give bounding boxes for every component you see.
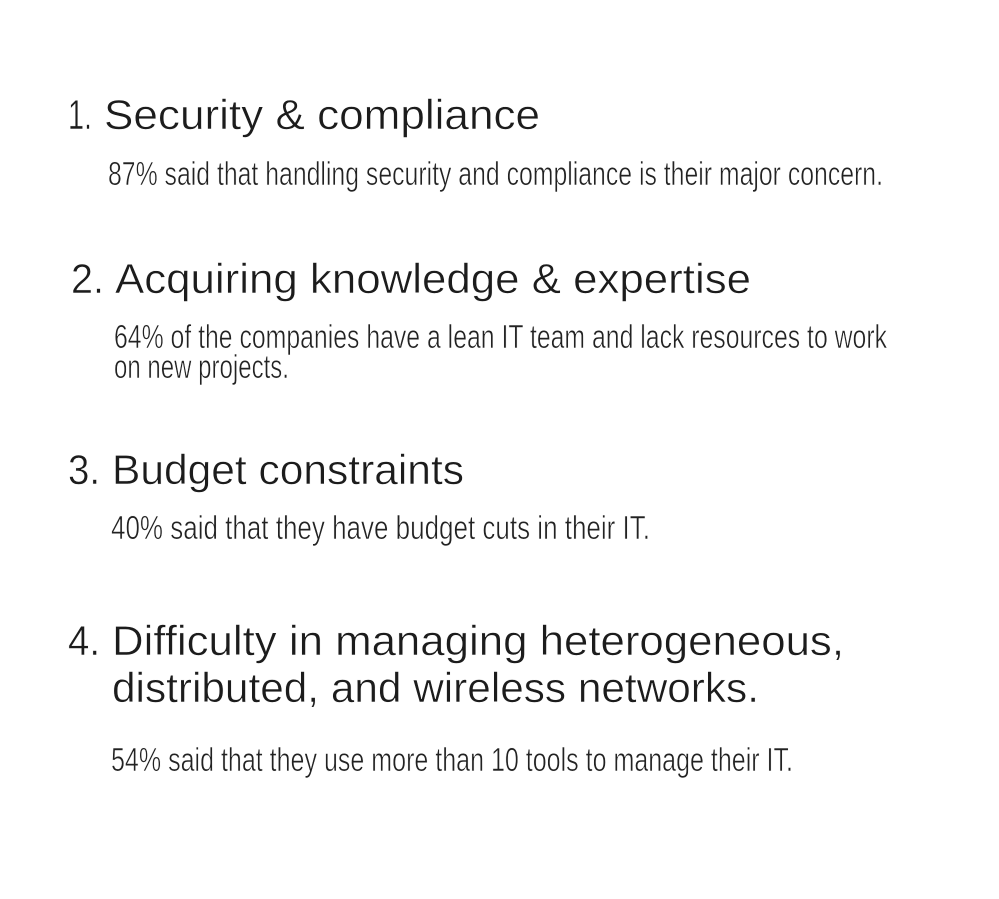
item 2: knowledge and expertise [71, 255, 887, 385]
heading 2: Acquiring knowledge & expertise [115, 255, 751, 302]
heading 4: 4. [68, 617, 100, 664]
description 4: 54% said that they use more than 10 tools to manage their IT. [111, 741, 793, 778]
heading 1: 1. [68, 91, 92, 138]
item 4: managing networks [68, 617, 844, 778]
item 3: budget constraints [68, 446, 650, 546]
heading 1: Security & compliance [104, 91, 540, 138]
heading 3: 3. [68, 446, 100, 493]
heading 4 [68, 617, 844, 711]
item 1: security and compliance [68, 91, 883, 192]
description 3: 40% said that they have budget cuts in their IT. [111, 509, 650, 546]
heading 4: distributed, and wireless networks. [112, 664, 759, 711]
description 2: on new projects. [114, 348, 289, 385]
heading 3: Budget constraints [112, 446, 464, 493]
description 2 [114, 318, 887, 385]
heading 4: Difficulty in managing heterogeneous, [112, 617, 844, 664]
heading 2: 2. [71, 255, 104, 302]
